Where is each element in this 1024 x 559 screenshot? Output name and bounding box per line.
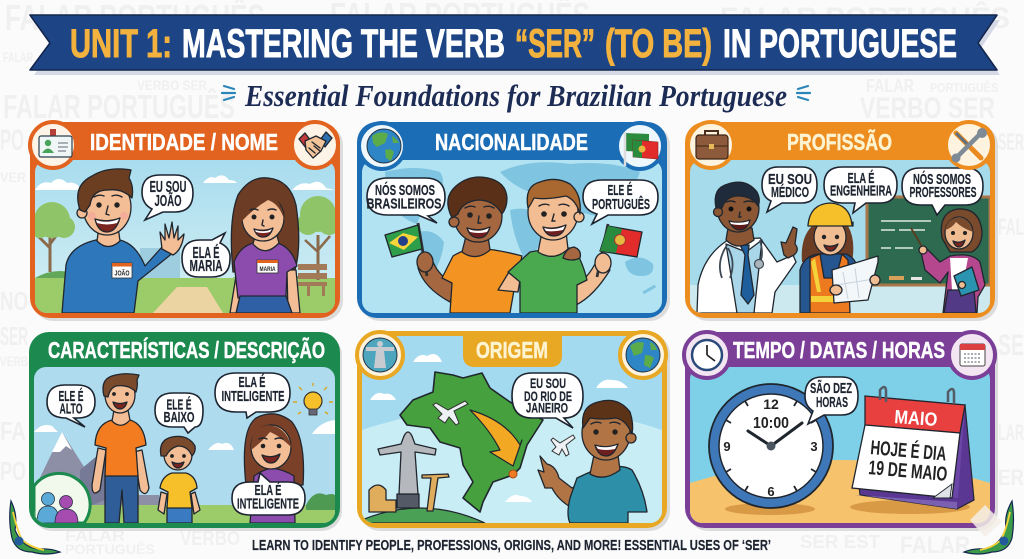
- background watermark words: PORTUGUÊS: [65, 540, 155, 557]
- speech bubble: ele é português: ELE É: [608, 182, 632, 199]
- ornament: right leaf: [964, 501, 1014, 554]
- speech bubble: ele é português: PORTUGUÊS: [592, 195, 650, 213]
- speech bubble: ele é português: [583, 180, 658, 224]
- calendar: [852, 387, 974, 509]
- character: teacher: [911, 209, 985, 313]
- speech bubble: ele é alto: ELE É: [58, 388, 84, 405]
- background watermark words: FALAR: [866, 76, 914, 96]
- character: engineer: [800, 203, 880, 313]
- speech bubble: ele é alto: [47, 385, 95, 427]
- panel: origem: [355, 331, 670, 531]
- speech bubble: ela é inteligente top: ELA É: [238, 374, 266, 391]
- speech bubble: são dez horas: [805, 377, 858, 424]
- flag: portugal: [595, 224, 642, 277]
- chalkboard: [867, 197, 990, 285]
- speech bubble: são dez horas: HORAS: [816, 395, 848, 411]
- speech bubble: ele é baixo: BAIXO: [164, 409, 195, 426]
- character: man with brazilian flag: [418, 177, 522, 313]
- heading tab: ORIGEM: [476, 337, 548, 363]
- character: man João: [62, 169, 184, 313]
- background watermark words: FALAR: [65, 528, 126, 545]
- speech bubble: eu sou do rio de janeiro: [512, 373, 583, 428]
- landmark: christ the redeemer: [355, 432, 485, 523]
- speech bubble: nós somos professores: NÓS SOMOS: [913, 170, 971, 188]
- panel: profissão: [685, 122, 998, 321]
- speech bubble: eu sou do rio de janeiro: DO RIO DE: [524, 388, 572, 404]
- character: boy: [158, 436, 200, 523]
- background watermark words: SER EST: [800, 532, 880, 552]
- speech bubble: ela é inteligente bottom: [232, 473, 305, 515]
- heading: CARACTERÍSTICAS / DESCRIÇÃO: [48, 336, 325, 363]
- name badge João: [112, 263, 132, 278]
- panel: nacionalidade: [357, 122, 670, 321]
- speech bubble: ela é maria: [182, 233, 230, 277]
- title text: ser: “SER”: [515, 22, 595, 66]
- heading: PROFISSÃO: [787, 128, 892, 155]
- clock: 10:00: [753, 415, 789, 432]
- clock: 3: [810, 439, 818, 454]
- speech bubble: são dez horas: SÃO DEZ: [810, 379, 852, 397]
- background watermark words: NO: [0, 286, 28, 316]
- icon: earth: [620, 332, 666, 378]
- title banner: [30, 15, 1000, 75]
- speech bubble: eu sou joão: [142, 175, 193, 220]
- icon: small clock: [684, 332, 730, 378]
- icon: small plane: [551, 435, 575, 456]
- speech bubble: eu sou joão: EU SOU: [150, 179, 186, 196]
- icon: id card: [30, 122, 76, 168]
- background watermark words: FALAR PORTUGUÊS: [720, 1, 1010, 35]
- icon: small calendar: [949, 332, 995, 378]
- background watermark words: FALAR: [900, 532, 970, 559]
- panel: características / descrição: [29, 332, 342, 531]
- calendar: HOJE É DIA: [870, 436, 947, 466]
- icon: people: [34, 473, 90, 523]
- speech bubble: eu sou joão: JOÃO: [154, 190, 182, 210]
- speech bubble: nós somos professores: PROFESSORES: [910, 184, 976, 201]
- clock: 12: [763, 396, 779, 412]
- character: woman: [244, 414, 304, 523]
- ornament: left leaf: [10, 501, 60, 554]
- speech bubble: nós somos professores: [902, 168, 983, 215]
- arrow to rio: [470, 410, 522, 466]
- background watermark words: PO: [0, 456, 26, 486]
- corner sparkle: [970, 505, 1002, 537]
- speech bubble: ela é maria: MARIA: [190, 258, 222, 275]
- icon: briefcase: [688, 122, 734, 168]
- speech bubble: ela é engenheira: ELA É: [848, 170, 874, 187]
- blueprint: [832, 256, 878, 303]
- speech bubble: eu sou médico: [762, 167, 817, 212]
- speech bubble: ela é engenheira: ENGENHEIRA: [830, 182, 892, 200]
- speech bubble: eu sou médico: EU SOU: [768, 171, 812, 188]
- speech bubble: ela é inteligente bottom: INTELIGENTE: [237, 496, 299, 512]
- background watermark words: VERB: [0, 353, 28, 369]
- panel: identidade / nome: [30, 122, 343, 321]
- mountains: [40, 432, 160, 505]
- speech bubble: nós somos brasileiros: NÓS SOMOS: [375, 181, 435, 199]
- background watermark words: VERBO: [180, 528, 240, 550]
- subtitle: Essential Foundations for Brazilian Portuguese: [244, 78, 787, 113]
- clock: 9: [723, 439, 731, 454]
- name badge Maria: MARIA: [260, 266, 276, 273]
- heading: TEMPO / DATAS / HORAS: [733, 337, 945, 363]
- flag: brazil: [385, 223, 433, 276]
- icon: flags: [617, 123, 663, 169]
- background watermark words: PORTUGUÊS: [930, 80, 998, 95]
- panel: tempo / datas / horas: [684, 332, 1002, 537]
- speech bubble: ele é alto: ALTO: [60, 400, 83, 418]
- icon: handshake: [292, 122, 338, 168]
- speech bubble: ela é inteligente top: INTELIGENTE: [222, 388, 284, 405]
- icon: plane on map: [433, 401, 468, 425]
- clock: [709, 384, 833, 508]
- speech bubble: ele é baixo: [155, 393, 203, 433]
- speech bubble: ele é baixo: ELE É: [166, 396, 192, 414]
- icon: light bulb: [293, 383, 333, 415]
- speech bubble: eu sou médico: MÉDICO: [771, 184, 809, 201]
- bench: [298, 264, 327, 296]
- calendar: MAIO: [894, 407, 938, 431]
- speech bubble: ela é engenheira: [824, 167, 897, 213]
- heading: IDENTIDADE / NOME: [90, 129, 278, 155]
- name badge João: JOÃO: [114, 268, 130, 278]
- speech bubble: ela é maria: ELA É: [192, 245, 220, 262]
- character: doctor: [697, 182, 797, 313]
- background watermark words: FALAR: [3, 49, 33, 65]
- icon: christ statue: [357, 332, 403, 378]
- background watermark words: SER: [0, 321, 28, 351]
- speech bubble: nós somos brasileiros: [366, 178, 445, 223]
- speech bubble: ela é inteligente top: [215, 373, 290, 418]
- map of brazil: [400, 372, 543, 512]
- background watermark words: FALAR PORTUGUÊS: [3, 88, 235, 125]
- speech bubble: eu sou do rio de janeiro: JANEIRO: [526, 400, 568, 416]
- title text: mastering the verb: MASTERING THE VERB: [182, 22, 505, 66]
- heading: NACIONALIDADE: [435, 129, 588, 155]
- character: tall man: [92, 374, 149, 523]
- character: man pointing: [538, 400, 647, 523]
- character: woman Maria: [230, 178, 300, 313]
- background watermark words: PO: [0, 124, 24, 157]
- background watermark words: VERBO SER: [137, 77, 207, 93]
- clock: 6: [767, 484, 775, 499]
- world map: [385, 162, 656, 294]
- icon: wrench and screwdriver: [946, 122, 992, 168]
- calendar: 19 DE MAIO: [868, 457, 948, 486]
- speech bubble: nós somos brasileiros: BRASILEIROS: [366, 196, 442, 212]
- footer text: LEARN TO IDENTIFY PEOPLE, PROFESSIONS, ORIGINS, AND MORE! ESSENTIAL USES OF ‘SER’: [252, 538, 771, 554]
- icon: globe: [359, 123, 405, 169]
- character: man with portuguese flag: [498, 179, 610, 313]
- background watermark words: FA: [0, 416, 26, 446]
- heading tab: [463, 331, 562, 367]
- background watermark words: VER: [0, 169, 26, 185]
- speech bubble: ela é inteligente bottom: ELA É: [254, 482, 282, 499]
- title text: unit number: UNIT 1:: [70, 22, 172, 66]
- title text: to be: (TO BE): [605, 22, 712, 66]
- speech bubble: eu sou do rio de janeiro: EU SOU: [530, 375, 566, 391]
